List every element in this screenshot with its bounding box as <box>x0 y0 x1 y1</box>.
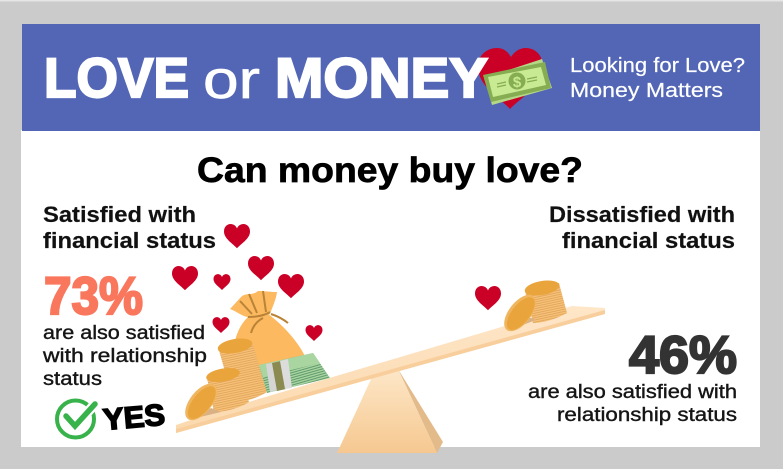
header subtitle: Looking for Love? <box>570 54 745 77</box>
header subtitle <box>570 54 745 102</box>
title word: money: MONEY <box>275 46 488 109</box>
icon: dollar bill <box>483 59 552 105</box>
coin stack: right <box>524 278 567 323</box>
yes label: YES <box>102 399 166 437</box>
icon: dollar bill: $ <box>513 74 522 91</box>
left description: status <box>43 368 102 390</box>
right label: financial status <box>562 228 735 253</box>
hearts <box>172 224 501 341</box>
stat: 46 percent: 46% <box>629 326 737 385</box>
seesaw plank <box>176 306 605 433</box>
header banner <box>22 24 760 131</box>
money bag <box>230 291 310 372</box>
icon: green check <box>57 400 95 438</box>
left description: are also satisfied <box>43 322 205 344</box>
left label: Satisfied with <box>43 202 196 227</box>
right description <box>528 381 737 426</box>
leaning coin: right <box>498 289 542 337</box>
coin stack: large <box>217 336 267 403</box>
cash bundle <box>259 353 330 393</box>
right description: relationship status <box>557 404 737 426</box>
stat: 73 percent: 73% <box>44 267 143 326</box>
leaning coin: left <box>179 378 223 426</box>
left label: financial status <box>43 228 216 253</box>
white panel <box>21 130 760 447</box>
heading: Can money buy love? <box>197 151 583 190</box>
left label <box>43 202 216 253</box>
header subtitle: Money Matters <box>570 79 723 102</box>
right label: Dissatisfied with <box>549 202 735 227</box>
title word: or: or <box>203 50 260 110</box>
right label <box>549 202 735 253</box>
seesaw fulcrum <box>337 369 443 453</box>
left description: with relationship <box>42 345 207 367</box>
title: love: LOVE <box>44 46 189 109</box>
coin stack: small <box>205 366 249 412</box>
right description: are also satisfied with <box>528 381 737 403</box>
icon: heart behind bill <box>478 48 543 109</box>
left description <box>42 322 207 390</box>
